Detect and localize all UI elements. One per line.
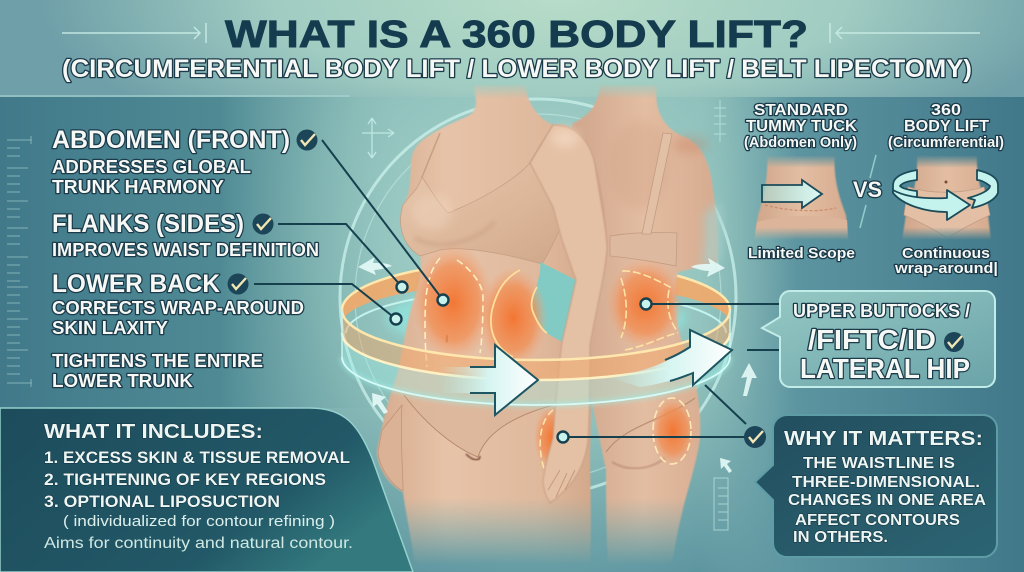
panel: why it matters xyxy=(755,415,997,557)
comparison: 360 body lift: Continuous xyxy=(902,245,990,262)
list item 3 note: ( individualized for contour refining ) xyxy=(63,513,335,530)
icon: callout check xyxy=(944,332,964,352)
arrow: limited front wrap xyxy=(762,180,822,208)
icon: why it matters check xyxy=(744,426,766,448)
comparison: standard tummy tuck: STANDARD xyxy=(754,102,848,119)
label: vs xyxy=(853,155,882,228)
comparison: 360 body lift: (Circumferential) xyxy=(888,134,1004,151)
back bra strap xyxy=(642,133,672,234)
panel: left background xyxy=(0,97,400,408)
decorative target circle xyxy=(340,99,736,530)
heading: why it matters: WHY IT MATTERS: xyxy=(784,428,983,450)
comparison: 360 body lift xyxy=(888,102,1004,277)
front bra xyxy=(401,163,562,264)
body text: AFFECT CONTOURS xyxy=(795,512,960,529)
label: flanks xyxy=(52,210,319,260)
thumbnail: abdomen torso xyxy=(754,155,848,240)
comparison: standard tummy tuck: Limited Scope xyxy=(748,245,855,262)
subtitle: (CIRCUMFERENTIAL BODY LIFT / LOWER BODY LIFT / BELT LIPECTOMY) xyxy=(62,55,972,83)
front arm xyxy=(530,125,607,503)
motion arrows xyxy=(358,257,757,473)
label: abdomen: TRUNK HARMONY xyxy=(52,177,224,197)
title arrows xyxy=(62,23,980,43)
panel: upper buttocks callout: UPPER BUTTOCKS / xyxy=(793,301,970,321)
body text xyxy=(788,455,986,546)
body text: THE WAISTLINE IS xyxy=(803,455,955,472)
label: abdomen: ADDRESSES GLOBAL xyxy=(52,157,251,177)
label: lower back: LOWER BACK xyxy=(52,270,220,298)
panel: upper buttocks callout: LATERAL HIP xyxy=(800,353,970,384)
comparison: 360 body lift: 360 xyxy=(931,102,961,119)
icon: flanks check xyxy=(252,214,274,234)
icon: abdomen check xyxy=(296,130,318,150)
figures xyxy=(377,85,722,565)
leader lines xyxy=(254,140,780,437)
heading: what it includes: WHAT IT INCLUDES: xyxy=(44,421,263,443)
label: abdomen: ABDOMEN (FRONT) xyxy=(52,126,290,154)
icon: lower back check xyxy=(228,274,248,294)
ring: front half xyxy=(342,310,730,405)
closing note: Aims for continuity and natural contour. xyxy=(44,535,353,552)
arrow: front wrap xyxy=(440,345,538,415)
front view figure xyxy=(377,85,695,565)
arrow: full wrap xyxy=(893,170,998,220)
front briefs xyxy=(439,402,470,452)
body text: IN OTHERS. xyxy=(793,529,888,546)
buttock shading xyxy=(612,458,665,468)
label: tightens xyxy=(52,351,263,391)
panel: upper buttocks callout xyxy=(762,291,995,387)
title: WHAT IS A 360 BODY LIFT? xyxy=(225,14,808,56)
list item 1: 1. EXCESS SKIN & TISSUE REMOVAL xyxy=(44,448,350,467)
body text: CHANGES IN ONE AREA xyxy=(788,492,986,509)
comparison: standard tummy tuck xyxy=(744,102,857,262)
arrow: back wrap xyxy=(607,330,732,387)
highlighted zones xyxy=(413,245,695,472)
body text: THREE-DIMENSIONAL. xyxy=(792,474,980,491)
ruler: left scale xyxy=(7,136,32,387)
panel: right background xyxy=(700,97,1024,572)
back view figure xyxy=(570,85,722,565)
comparison: 360 body lift: wrap-around| xyxy=(894,260,998,277)
ring: back half xyxy=(342,260,730,352)
panel: upper buttocks callout: /FIFTC/ID xyxy=(808,324,936,355)
label: lower back: CORRECTS WRAP-AROUND xyxy=(52,298,304,318)
list item 3: 3. OPTIONAL LIPOSUCTION xyxy=(44,492,280,511)
left hand xyxy=(378,405,403,491)
comparison: standard tummy tuck: (Abdomen Only) xyxy=(744,134,857,151)
label: flanks: IMPROVES WAIST DEFINITION xyxy=(52,240,319,260)
label: flanks: FLANKS (SIDES) xyxy=(52,210,244,238)
list item 2: 2. TIGHTENING OF KEY REGIONS xyxy=(44,470,326,489)
thumbnail: waist torso xyxy=(902,155,991,240)
back briefs xyxy=(606,398,695,452)
comparison: 360 body lift: BODY LIFT xyxy=(904,118,989,135)
panel: what it includes xyxy=(0,408,413,572)
label: abdomen xyxy=(52,126,290,197)
label: vs: VS xyxy=(853,177,882,202)
back bra band xyxy=(610,232,677,266)
label: lower back xyxy=(52,270,304,338)
comparison: standard tummy tuck: TUMMY TUCK xyxy=(746,118,857,135)
label: tightens: TIGHTENS THE ENTIRE xyxy=(52,351,263,371)
label: lower back: SKIN LAXITY xyxy=(52,318,168,338)
label: tightens: LOWER TRUNK xyxy=(52,371,193,391)
marker dots xyxy=(390,282,652,442)
waist gap showing background xyxy=(532,262,576,342)
header band xyxy=(0,0,1024,97)
